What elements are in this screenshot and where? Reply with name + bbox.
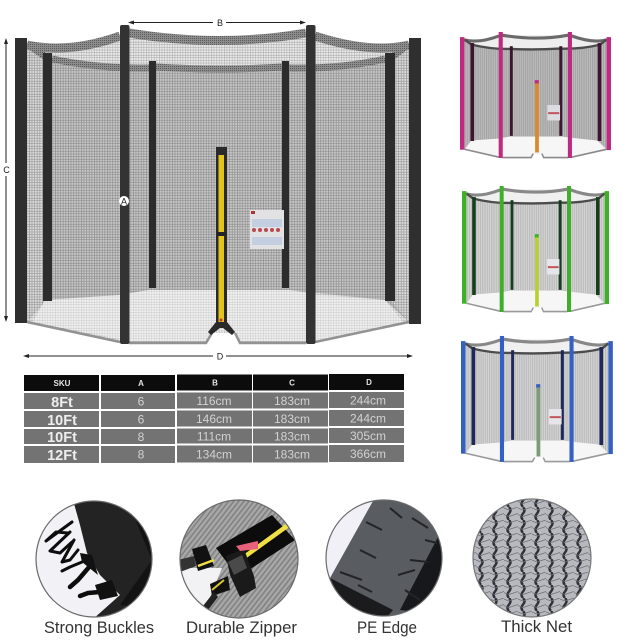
net: top band (27, 33, 409, 48)
table header: B (212, 378, 218, 388)
table row: 12Ft (24, 445, 404, 464)
warning sign (250, 210, 284, 249)
pink variant (460, 32, 611, 158)
table row: 10Ft, 8: 111cm (197, 430, 231, 444)
buckle hooks (46, 522, 100, 596)
zipper band (216, 515, 294, 568)
blue net (465, 339, 608, 462)
detail: thick net (473, 499, 591, 617)
label: PE Edge: PE Edge (357, 618, 417, 637)
dimension C (3, 38, 10, 322)
dimension B: B (217, 18, 223, 28)
table header: C (289, 378, 295, 388)
table row: 10Ft, 6 (24, 410, 404, 429)
zipper (208, 147, 235, 335)
zipper pull (236, 541, 258, 551)
label A (119, 196, 129, 206)
net: right side panel (390, 43, 409, 322)
green zipper and sign (535, 237, 539, 306)
table row: 10Ft, 8: 8 (138, 430, 145, 444)
pink poles (470, 43, 601, 141)
dimension C: C (3, 165, 10, 175)
dimension D (23, 352, 413, 362)
main trampoline enclosure net (15, 25, 421, 344)
table row: 8Ft (24, 392, 404, 411)
table row: 10Ft, 6: 10Ft (47, 413, 77, 429)
outer poles (15, 38, 421, 324)
table header: SKU (54, 379, 71, 388)
table row: 8Ft: 183cm (274, 394, 310, 408)
blue poles (471, 347, 603, 445)
table row: 10Ft, 8: 305cm (350, 429, 386, 443)
table row: 10Ft, 6: 6 (138, 412, 145, 426)
detail: durable zipper (179, 499, 299, 619)
label: Thick Net: Thick Net (501, 617, 572, 636)
front poles (120, 25, 316, 344)
table header: D (366, 378, 372, 387)
size table (24, 374, 404, 464)
dimension D: D (217, 352, 224, 362)
table row: 8Ft: 116cm (196, 394, 232, 408)
net: floor opening (33, 290, 403, 341)
table row: 10Ft, 8 (24, 428, 404, 446)
table row: 8Ft: 244cm (350, 394, 386, 408)
green net (466, 189, 605, 312)
PE edge texture (340, 508, 437, 600)
label A: A (121, 196, 127, 206)
table row: 8Ft: 6 (138, 394, 145, 408)
label: Strong Buckles: Strong Buckles (44, 618, 154, 637)
pink net (464, 35, 607, 158)
net: back wall (27, 43, 409, 322)
dimension B (128, 18, 306, 28)
table row: 12Ft: 366cm (350, 447, 386, 461)
detail: PE edge (325, 499, 443, 617)
blue variant (461, 336, 613, 462)
net: left side panel (27, 43, 47, 322)
net: bottom edge (27, 322, 409, 343)
table row: 12Ft: 134cm (196, 448, 232, 462)
table row: 12Ft: 12Ft (47, 448, 77, 464)
table header (24, 374, 404, 391)
table row: 12Ft: 183cm (274, 448, 310, 462)
buckle (226, 549, 256, 597)
back poles (43, 53, 395, 301)
table row: 12Ft: 8 (138, 448, 145, 462)
pink zipper and sign (535, 83, 539, 152)
detail: strong buckles (35, 500, 153, 618)
label: Durable Zipper: Durable Zipper (186, 618, 297, 637)
table row: 10Ft, 6: 244cm (350, 412, 386, 426)
net: second band (27, 44, 409, 69)
table row: 10Ft, 6: 183cm (274, 412, 310, 426)
table row: 10Ft, 8: 183cm (274, 430, 310, 444)
green variant (462, 186, 609, 312)
table row: 10Ft, 6: 146cm (196, 412, 232, 426)
table row: 10Ft, 8: 10Ft (47, 430, 77, 446)
net: front panels and upper mesh (27, 33, 409, 343)
table row: 8Ft: 8Ft (51, 395, 73, 411)
blue zipper and sign (537, 387, 540, 456)
table header: A (138, 379, 144, 388)
green poles (472, 197, 600, 295)
